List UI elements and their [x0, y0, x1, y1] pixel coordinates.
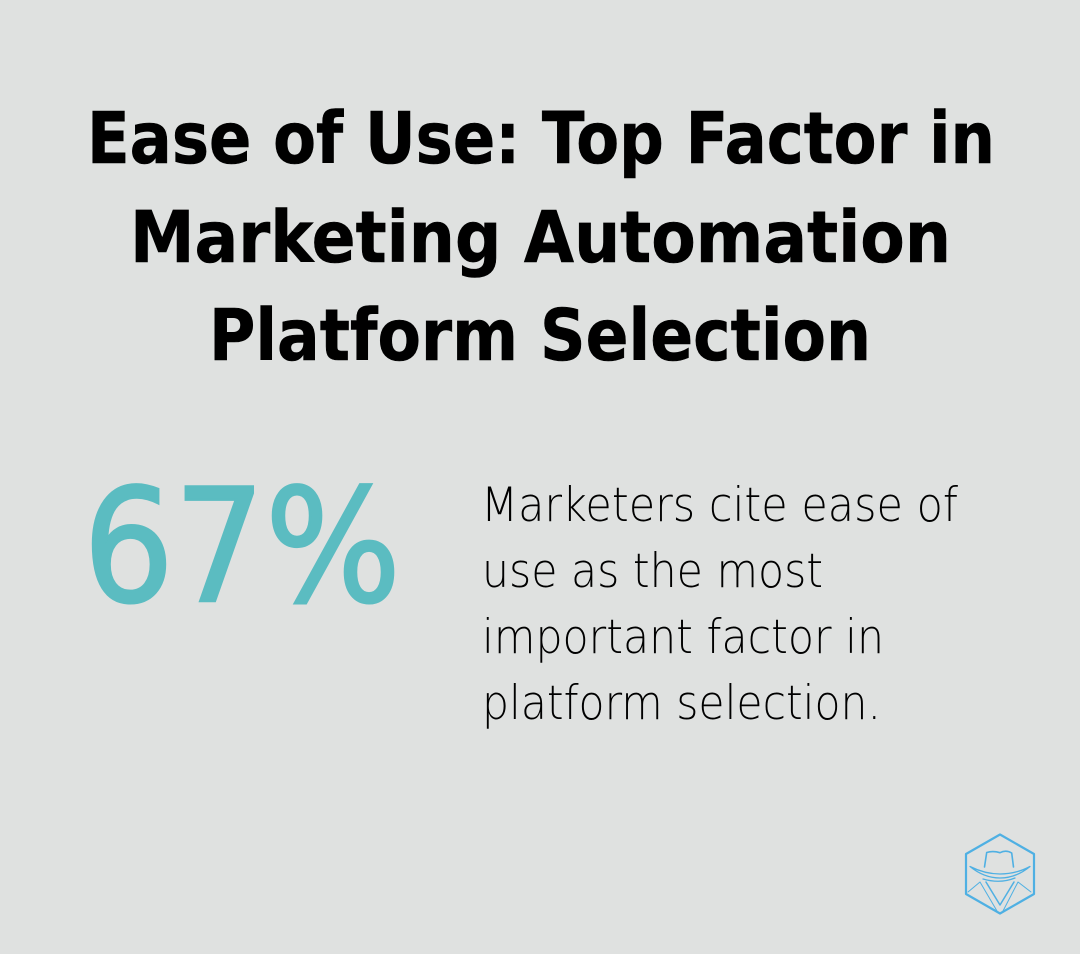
description text: important factor in	[482, 610, 884, 665]
statistic: 67%: 67%	[83, 456, 401, 639]
title: Platform Selection	[209, 294, 871, 377]
description text: platform selection.	[482, 676, 881, 731]
title: Marketing Automation	[130, 196, 951, 279]
description text: use as the most	[482, 544, 823, 599]
description text	[481, 478, 958, 731]
icon: hexagon logo with hat and collar	[966, 834, 1034, 914]
description text: Marketers cite ease of	[481, 478, 958, 533]
title	[87, 97, 995, 377]
